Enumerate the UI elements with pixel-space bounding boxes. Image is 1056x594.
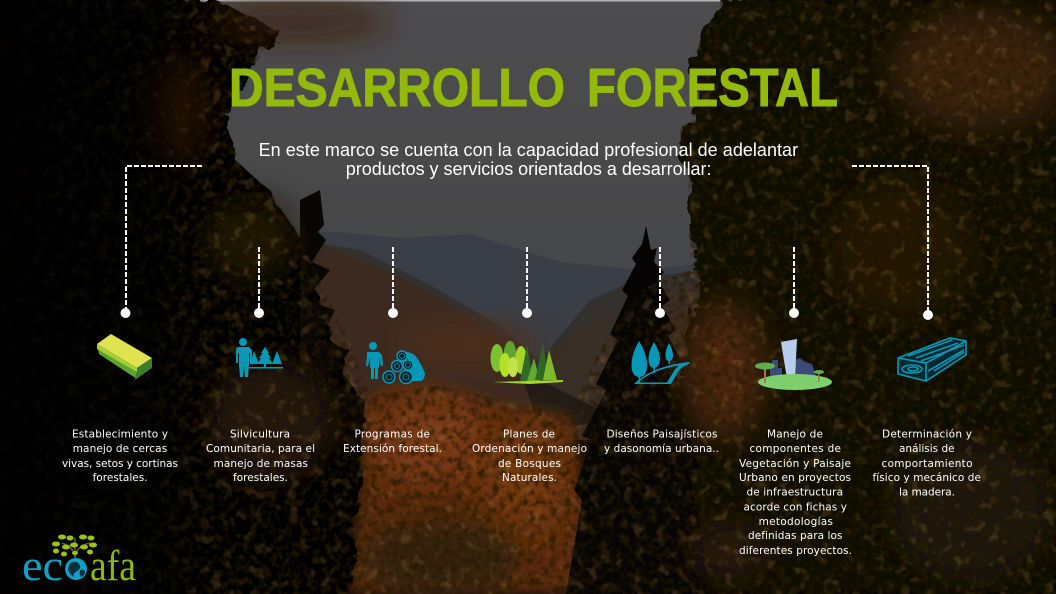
connector 3 [388,247,398,318]
text: wood analysis [872,428,981,498]
text: urban vegetation: definidas para los [748,530,842,542]
text: extension programmes [343,428,442,455]
text: hedges: forestales. [93,472,148,484]
text: forest management plans [472,428,587,484]
text: hedges: vivas, setos y cortinas [62,458,178,470]
text: landscape design: y dasonomía urbana.. [604,443,719,455]
text: urban vegetation: metodologías [759,516,833,528]
text: wood analysis: comportamiento [882,458,972,470]
text: forest management plans: de Bosques [498,458,561,470]
connector 2 [254,247,264,318]
text: landscape design [604,428,719,455]
text: forest management plans: Naturales. [502,472,557,484]
text: wood analysis: análisis de [899,443,955,455]
text: urban vegetation: de infraestructura [746,486,843,498]
logo: ecoafa: ec [22,543,63,590]
text: extension programmes: Extensión forestal. [343,443,442,455]
central spruce [566,226,712,594]
text: hedges [62,428,178,484]
text: hedges: manejo de cercas [73,443,167,455]
text: forest management plans: Planes de [503,428,555,440]
intro text [259,140,798,179]
text: urban vegetation: componentes de [750,443,841,455]
connector 6 [789,247,799,318]
text: hedges: Establecimiento y [72,428,168,440]
text: community forestry: Silvicultura [230,428,290,440]
title [229,58,838,118]
dashed connector: right bracket [852,166,933,320]
text: wood analysis: físico y mecánico de [872,472,981,484]
icon: community forester with trees [236,338,283,377]
title: DESARROLLO [229,58,565,118]
small spruce left of valley [300,190,365,450]
intro text: En este marco se cuenta con la capacidad profesional de adelantar [259,140,798,160]
text: community forestry: Comunitaria, para el [206,443,315,455]
text: urban vegetation: Vegetación y Paisaje [739,458,851,470]
icon: natural forest [490,341,563,384]
text: forest management plans: Ordenación y manejo [472,443,587,455]
text: landscape design: Diseños Paisajísticos [606,428,718,440]
text: urban vegetation: diferentes proyectos. [739,545,852,557]
text: community forestry [206,428,315,484]
icon: wood beam [898,338,966,381]
text: wood analysis: Determinación y [882,428,972,440]
text: extension programmes: Programas de [354,428,430,440]
text: community forestry: manejo de masas [214,458,308,470]
icon: landscape design [632,341,690,384]
icon: forester with log pile [366,342,425,384]
title: FORESTAL [587,58,838,118]
icon: urban tower and park [755,339,832,390]
text: urban vegetation: Manejo de [767,428,823,440]
logo: ecoafa [22,534,136,590]
text: wood analysis: la madera. [899,486,955,498]
connector 5 [655,247,665,318]
intro text: productos y servicios orientados a desarrollar: [346,159,712,179]
connector 4 [522,247,532,318]
icon: hedge block [97,334,152,380]
text: community forestry: forestales. [233,472,288,484]
logo: ecoafa: afa [90,543,136,590]
text: urban vegetation [739,428,852,557]
text: urban vegetation: Urbano en proyectos [739,472,851,484]
text: urban vegetation: acorde con fichas y [744,502,847,514]
dashed connector: left bracket [120,166,202,318]
